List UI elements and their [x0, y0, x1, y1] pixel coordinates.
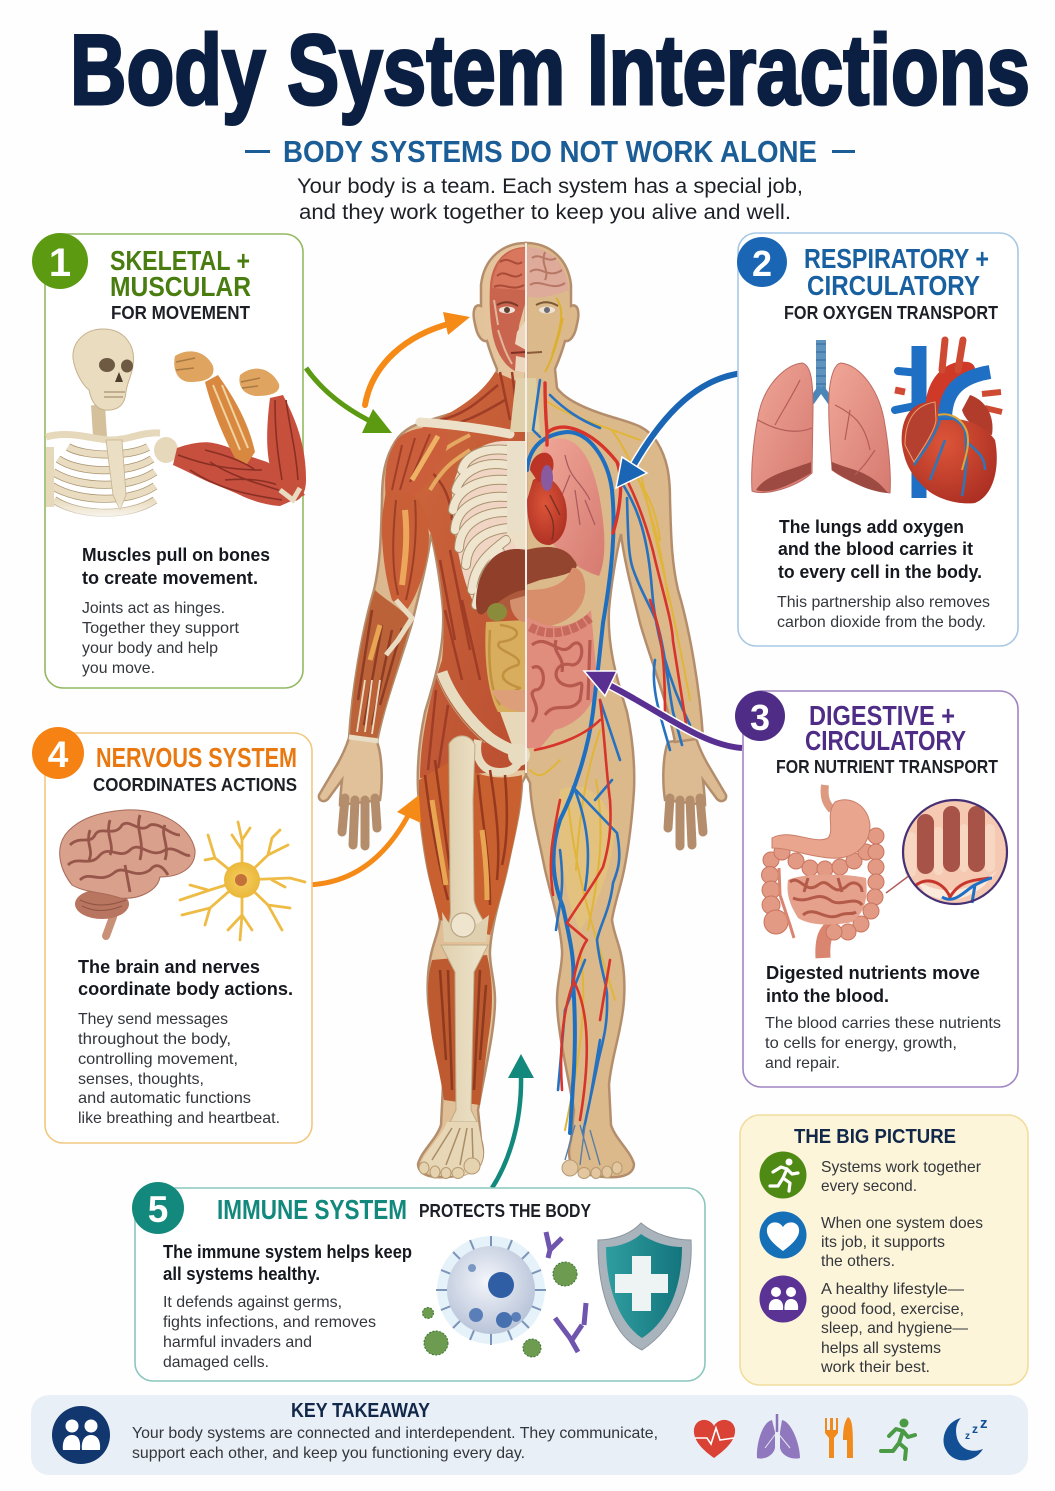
heading: THE BIG PICTURE — [794, 1126, 956, 1148]
illustration: germs — [422, 1262, 577, 1357]
text: supports others — [821, 1215, 983, 1270]
body text: and repair. — [765, 1055, 840, 1072]
panel frame — [740, 1115, 1028, 1385]
rib cage — [452, 441, 526, 606]
body silhouette — [319, 243, 726, 1177]
heading: CIRCULATORY — [807, 270, 980, 301]
central body figure — [319, 243, 726, 1178]
heading — [217, 1194, 592, 1225]
gallbladder — [487, 603, 507, 621]
clavicle — [420, 422, 510, 434]
illustration: immune cell — [436, 1236, 546, 1345]
panel 2: respiratory and circulatory — [737, 233, 1018, 646]
heading: RESPIRATORY + — [804, 243, 989, 274]
head muscles — [490, 247, 526, 373]
intro text: Your body is a team. Each system has a special job, — [297, 175, 803, 198]
right foot lines — [565, 1125, 600, 1165]
icon: moon and z letters: z — [965, 1431, 970, 1442]
toes — [419, 1158, 480, 1178]
icon: running person — [881, 1418, 915, 1459]
number badge: 4 — [48, 734, 69, 775]
body text — [78, 956, 293, 1127]
body text: The immune system helps keep — [163, 1241, 412, 1262]
femoral head — [508, 744, 530, 766]
illustration: villi magnified circle — [903, 800, 1007, 904]
panel frame — [743, 691, 1018, 1087]
body text: Joints act as hinges. — [82, 600, 225, 617]
left half: muscles and skeleton — [349, 247, 530, 1178]
sacrum — [500, 712, 526, 752]
heading: PROTECTS THE BODY — [419, 1200, 592, 1221]
key takeaway bar — [31, 1395, 1028, 1475]
body text: carbon dioxide from the body. — [777, 614, 986, 631]
small intestine — [787, 874, 867, 925]
body text: into the blood. — [766, 985, 889, 1006]
tibia — [441, 945, 488, 1122]
text: supports others: its job, it supports — [821, 1234, 945, 1251]
number badge: 2 — [752, 243, 772, 284]
icon: people — [52, 1406, 110, 1464]
stomach — [772, 800, 870, 858]
illustration: skeleton and flexed arm — [46, 329, 306, 524]
body text: Together they support — [82, 620, 240, 637]
icon: moon and z letters: z — [980, 1415, 988, 1432]
icon: moon and z letters: z — [972, 1422, 978, 1436]
arrow: immune system (teal) — [492, 1054, 534, 1188]
body text: Muscles pull on bones — [82, 544, 270, 565]
icon: running person — [760, 1152, 806, 1198]
colon — [762, 828, 884, 940]
heart — [527, 477, 567, 545]
text: healthy lifestyle: A healthy lifestyle— — [821, 1281, 964, 1298]
skull — [73, 329, 133, 410]
panel frame — [45, 733, 312, 1143]
panel frame — [738, 233, 1018, 646]
text: work together — [821, 1159, 982, 1195]
heading: MUSCULAR — [110, 271, 251, 302]
thigh muscles — [419, 760, 522, 935]
blue vessels — [527, 432, 614, 1133]
arrow: body up to head (orange) — [365, 312, 470, 405]
body text: They send messages — [78, 1011, 228, 1028]
rectum — [823, 925, 838, 958]
face — [539, 306, 555, 314]
body text: damaged cells. — [163, 1354, 269, 1371]
text: work together: every second. — [821, 1178, 917, 1195]
heading: COORDINATES ACTIONS — [93, 774, 297, 795]
forearm muscles — [350, 590, 411, 738]
number badge — [735, 691, 785, 741]
illustration: neuron — [180, 822, 305, 940]
illustration: brain — [60, 810, 195, 936]
intro text: and they work together to keep you alive and well. — [299, 201, 791, 224]
heading: KEY TAKEAWAY — [291, 1400, 431, 1422]
text: healthy lifestyle — [820, 1281, 968, 1376]
pelvis — [442, 672, 520, 752]
body text — [132, 1425, 658, 1462]
number badge — [32, 727, 84, 779]
illustration: digestive tract — [762, 785, 910, 958]
panel 5: immune system — [132, 1182, 705, 1381]
heading: FOR NUTRIENT TRANSPORT — [776, 756, 999, 777]
heading: IMMUNE SYSTEM — [217, 1194, 407, 1225]
body text: you move. — [82, 660, 155, 677]
number badge: 5 — [148, 1189, 168, 1230]
neck vertebrae — [510, 378, 526, 432]
centre dividing line — [525, 243, 527, 773]
right half: organs and vessels — [510, 247, 690, 1178]
body text: fights infections, and removes — [163, 1314, 376, 1331]
icon: people — [760, 1276, 806, 1322]
body text: to every cell in the body. — [778, 561, 982, 582]
illustration: heart — [895, 340, 1002, 503]
right toes — [562, 1160, 622, 1178]
illustration: antibodies — [546, 1232, 586, 1352]
heading: FOR OXYGEN TRANSPORT — [784, 302, 999, 323]
body text: It defends against germs, — [163, 1294, 342, 1311]
arrow: digestive and circulatory (purple) — [584, 671, 742, 748]
text: healthy lifestyle: good food, exercise, — [821, 1301, 964, 1318]
lung — [538, 438, 604, 576]
icon: fork and knife — [825, 1417, 853, 1458]
icon: heart — [760, 1212, 806, 1258]
fists — [174, 351, 213, 382]
body text: like breathing and heartbeat. — [78, 1110, 280, 1127]
bar background — [31, 1395, 1028, 1475]
liver — [526, 547, 577, 585]
panel frame — [135, 1188, 705, 1381]
icon: lungs — [757, 1414, 800, 1459]
body text: This partnership also removes — [777, 594, 990, 611]
illustration: lungs — [752, 340, 890, 493]
heading: CIRCULATORY — [805, 725, 966, 756]
body text: throughout the body, — [78, 1031, 231, 1048]
heading: NERVOUS SYSTEM — [96, 742, 297, 773]
yellow thigh glow — [559, 786, 615, 930]
red vessels — [545, 383, 621, 533]
torso muscles — [392, 372, 526, 778]
number badge: 1 — [49, 241, 71, 285]
nerves — [530, 400, 690, 1130]
number badge — [737, 237, 787, 287]
text: work together: Systems work together — [821, 1159, 982, 1176]
femur — [448, 736, 486, 925]
deltoid muscle — [385, 427, 448, 507]
heading: DIGESTIVE + — [809, 700, 955, 731]
body text: The brain and nerves — [78, 956, 260, 977]
text: healthy lifestyle: work their best. — [820, 1359, 930, 1376]
illustration: shield with cross — [598, 1223, 691, 1350]
body text: and automatic functions — [78, 1090, 251, 1107]
number badge: 3 — [750, 697, 770, 738]
panel 4: nervous system — [32, 727, 312, 1143]
body text — [765, 962, 1001, 1072]
body text: support each other, and keep you functioning every day. — [132, 1445, 525, 1462]
body text: and the blood carries it — [778, 538, 973, 559]
panel: the big picture — [740, 1115, 1028, 1385]
body text: senses, thoughts, — [78, 1071, 204, 1088]
body text — [777, 516, 990, 631]
body text — [82, 544, 270, 677]
heading — [93, 742, 297, 795]
arrow: respiratory and circulatory (blue) — [616, 373, 743, 488]
esophagus — [825, 785, 832, 810]
body text: all systems healthy. — [163, 1263, 320, 1284]
brain — [526, 247, 569, 297]
body text: Your body systems are connected and interdependent. They communicate, — [132, 1425, 658, 1442]
arrow: nervous system (orange) — [303, 795, 421, 885]
heading — [784, 243, 999, 323]
biceps muscle — [382, 490, 429, 612]
body text: harmful invaders and — [163, 1334, 312, 1351]
intro text — [297, 175, 803, 224]
text: healthy lifestyle: sleep, and hygiene— — [821, 1320, 968, 1337]
ascending colon — [485, 620, 526, 712]
body text: controlling movement, — [78, 1051, 238, 1068]
text: supports others: the others. — [821, 1253, 895, 1270]
body text: The lungs add oxygen — [779, 516, 964, 537]
knee joint — [442, 912, 489, 942]
number badge — [32, 233, 88, 289]
stomach — [526, 568, 585, 627]
arrow: skeletal to body (green) — [306, 368, 392, 433]
body text: to create movement. — [82, 567, 258, 588]
neck vertebrae — [526, 378, 540, 432]
body text: The blood carries these nutrients — [765, 1015, 1001, 1032]
icon: moon and z letters — [944, 1415, 988, 1460]
body text: your body and help — [82, 640, 218, 657]
foot bones — [420, 1122, 483, 1176]
body text: coordinate body actions. — [78, 978, 293, 999]
arm muscles — [173, 442, 305, 506]
heading — [110, 245, 251, 323]
calf muscles — [428, 955, 492, 1105]
subtitle: BODY SYSTEMS DO NOT WORK ALONE — [283, 134, 817, 169]
liver — [476, 549, 526, 614]
heading: FOR MOVEMENT — [111, 302, 251, 323]
panel frame — [45, 234, 303, 688]
spine and ribcage — [98, 405, 100, 437]
number badge — [132, 1182, 184, 1234]
panel 3: digestive and circulatory — [735, 691, 1018, 1087]
intestines — [526, 610, 597, 748]
body text: Digested nutrients move — [766, 962, 980, 983]
text: supports others: When one system does — [821, 1215, 983, 1232]
main vessels — [527, 380, 690, 1133]
body text — [163, 1241, 412, 1371]
heading — [776, 700, 999, 777]
icon: heart with pulse — [694, 1420, 735, 1458]
text: healthy lifestyle: helps all systems — [821, 1340, 941, 1357]
heading: SKELETAL + — [110, 245, 250, 276]
body text: to cells for energy, growth, — [765, 1035, 957, 1052]
panel 1: skeletal and muscular — [32, 233, 306, 688]
